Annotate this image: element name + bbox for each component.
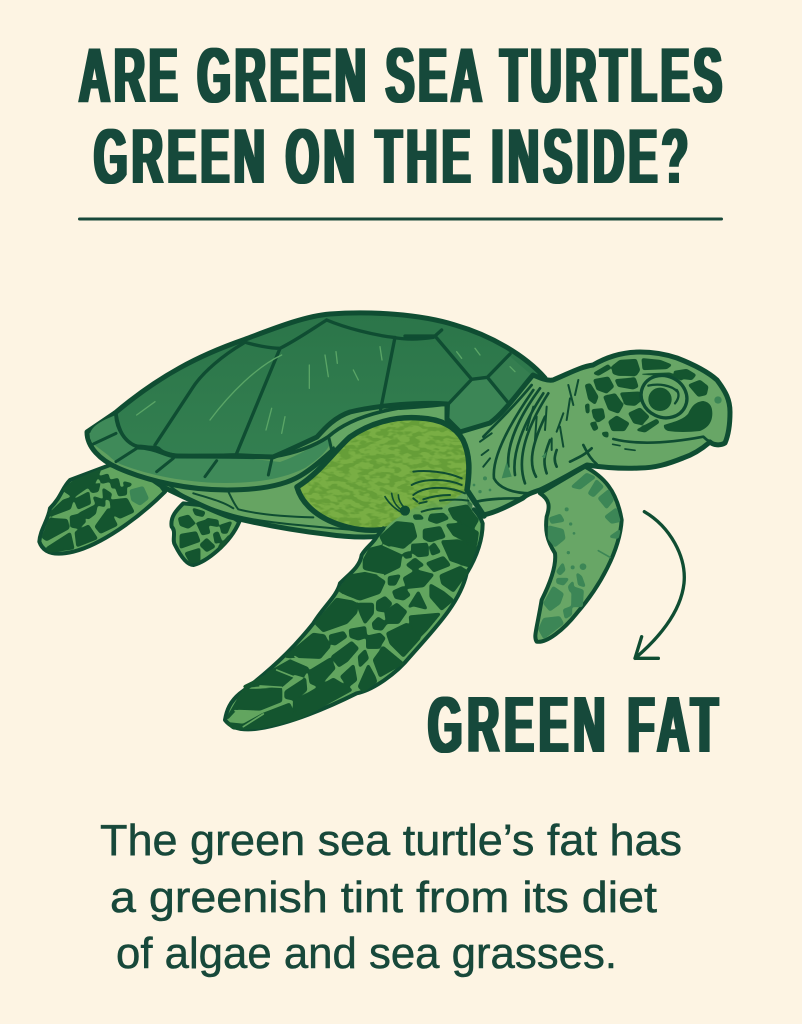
label: green fat: GREEN FAT: [428, 680, 718, 769]
neck and head fill: [460, 352, 730, 515]
flipper fill: [225, 496, 483, 729]
flipper scales: [227, 506, 478, 728]
front flipper: large: [225, 496, 483, 729]
mouth: [613, 437, 719, 445]
body text: a greenish tint from its diet: [110, 873, 657, 922]
flipper outline: [225, 509, 483, 729]
eye: [634, 368, 694, 425]
illustration: green sea turtle: [39, 313, 730, 729]
body text: [100, 816, 682, 978]
shell: rim and marginal scutes: [87, 340, 530, 490]
head scales: [586, 359, 722, 450]
flipper light veins: [235, 545, 402, 727]
body text: of algae and sea grasses.: [116, 929, 617, 978]
plastron seam lines: [170, 486, 373, 532]
rear flipper: far left: [39, 465, 165, 554]
body text: The green sea turtle’s fat has: [100, 816, 682, 865]
title: [79, 33, 722, 200]
beak patch: [664, 401, 712, 432]
arrow to label: [635, 512, 684, 658]
rear flipper: small inner: [171, 503, 239, 565]
title divider: [78, 218, 723, 220]
neck and head: [447, 352, 730, 515]
shell: scute lines: [90, 320, 433, 477]
flipper shoulder folds: [385, 471, 468, 516]
plastron: underside of the body: [150, 420, 470, 537]
green fat outline: [297, 418, 484, 530]
title: ARE GREEN SEA TURTLES: [79, 33, 722, 119]
neck folds: [473, 380, 597, 502]
green fat patch: [297, 418, 469, 530]
neck and head outline: [447, 352, 730, 515]
front flipper: right: [535, 467, 622, 642]
shell: carapace: [115, 313, 545, 457]
shell: right-hand scutes: [400, 330, 532, 432]
title: GREEN ON THE INSIDE?: [94, 114, 688, 200]
